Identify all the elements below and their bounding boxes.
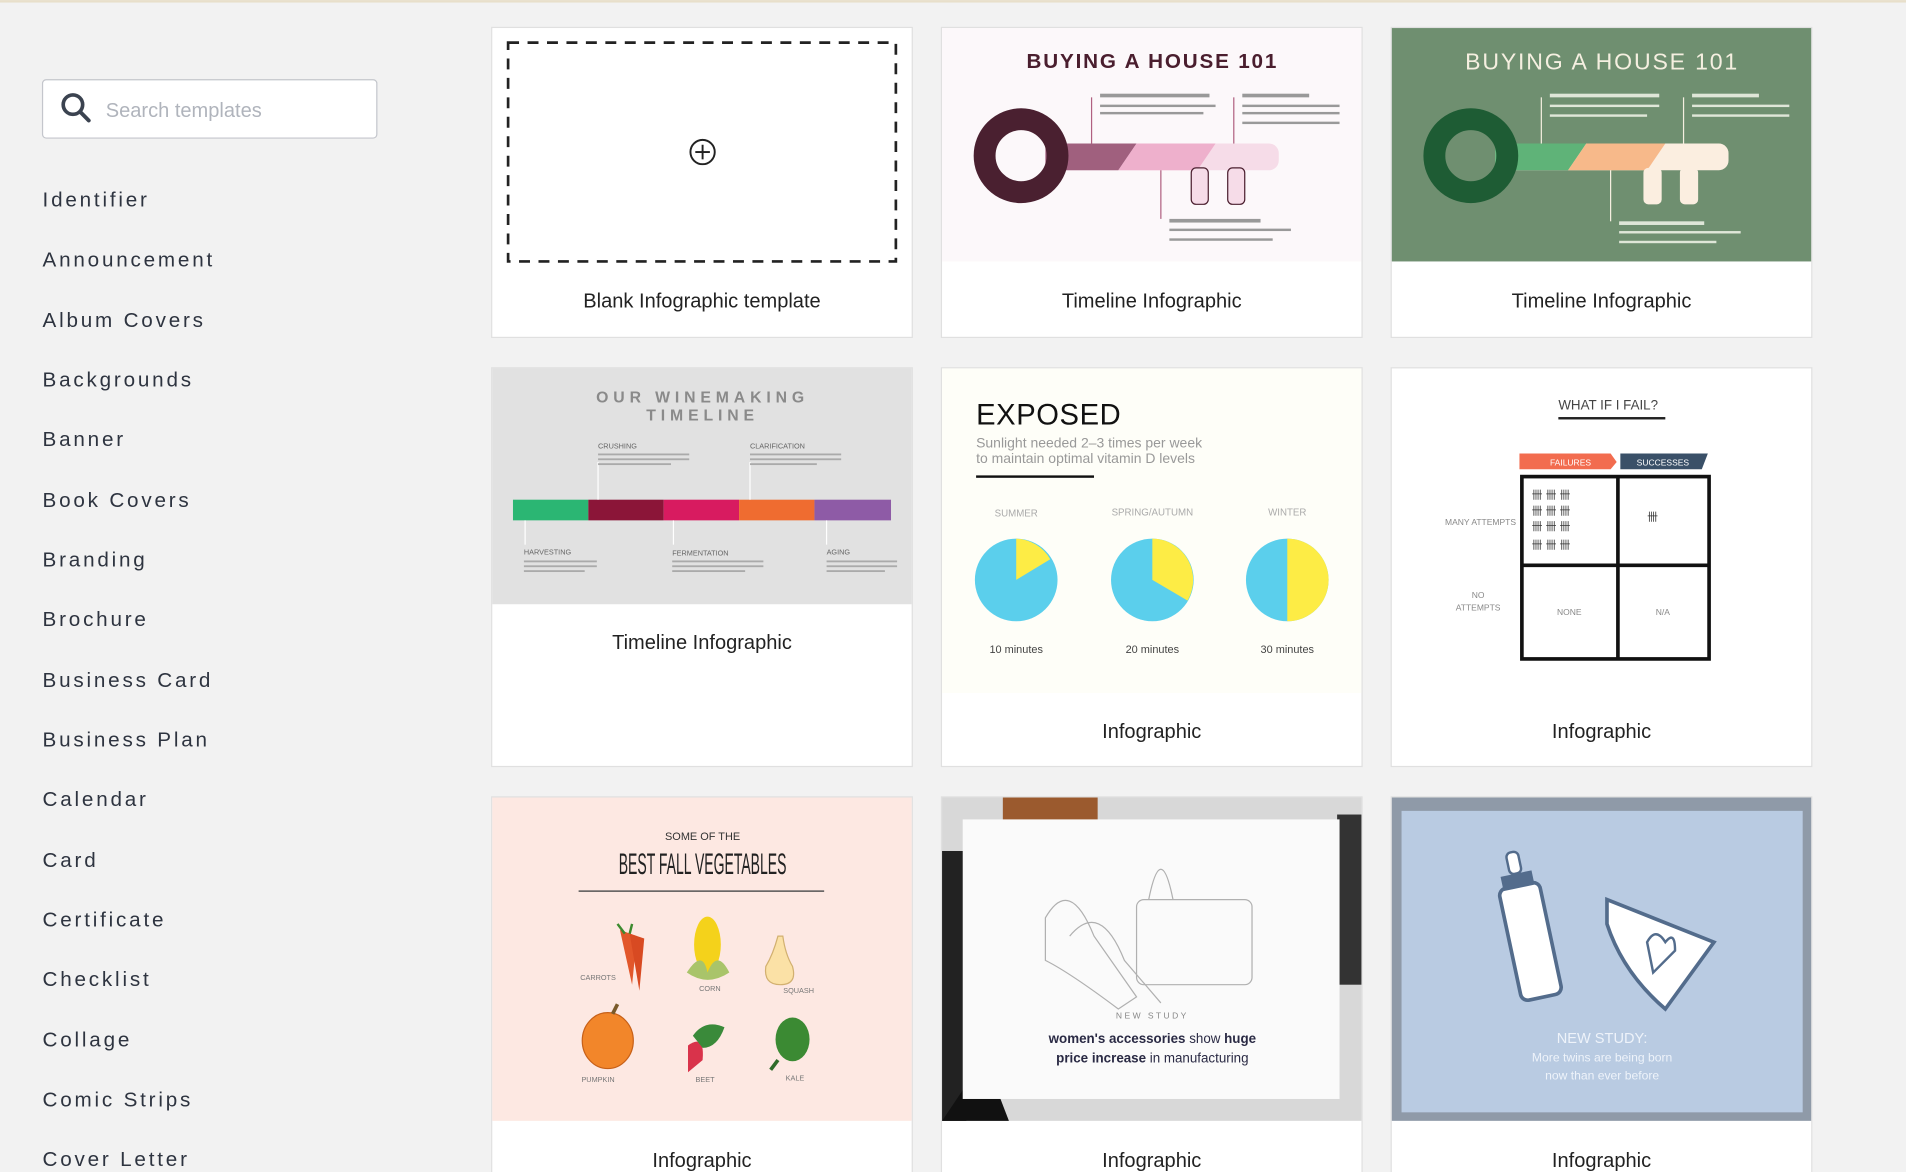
pie: summer bbox=[975, 539, 1058, 621]
card: exposed pie charts: WINTER bbox=[1268, 507, 1306, 518]
card: winemaking timeline: Timeline Infographic bbox=[612, 632, 792, 654]
sidebar category list: Certificate bbox=[43, 908, 166, 931]
card: exposed pie charts: EXPOSED bbox=[976, 399, 1121, 431]
card: what if I fail tally: 卌 卌 卌 bbox=[1532, 520, 1571, 533]
card: best fall vegetables: SOME OF THE bbox=[665, 831, 740, 843]
card: best fall vegetables: Infographic bbox=[652, 1150, 752, 1172]
card: timeline buying a house (pink) bbox=[941, 27, 1362, 337]
card: what if I fail tally: MANY ATTEMPTS bbox=[1445, 517, 1516, 527]
sidebar category list: Album Covers bbox=[43, 309, 206, 332]
card: exposed pie charts: to maintain optimal vitamin D levels bbox=[976, 450, 1195, 466]
card: exposed pie charts bbox=[941, 368, 1362, 767]
sidebar category list: Comic Strips bbox=[43, 1088, 193, 1111]
card: best fall vegetables: SQUASH bbox=[783, 986, 814, 995]
card: winemaking timeline: FERMENTATION bbox=[672, 549, 729, 558]
sidebar category list: Checklist bbox=[43, 968, 152, 991]
card: what if I fail tally: ATTEMPTS bbox=[1456, 602, 1501, 612]
icon: shoes and handbag sketch bbox=[1045, 869, 1252, 1009]
card: timeline buying a house (green): BUYING A HOUSE 101 bbox=[1465, 48, 1739, 74]
card: best fall vegetables: PUMPKIN bbox=[581, 1075, 615, 1084]
card: best fall vegetables: CORN bbox=[699, 984, 721, 993]
card: timeline buying a house (green) bbox=[1391, 27, 1812, 337]
card: timeline buying a house (pink): Timeline Infographic bbox=[1062, 291, 1242, 313]
card: women's accessories study: women's accessories show huge bbox=[1048, 1031, 1256, 1046]
card: winemaking timeline bbox=[492, 368, 912, 767]
card: women's accessories study: NEW STUDY bbox=[1116, 1011, 1189, 1021]
icon: beet bbox=[688, 1024, 724, 1072]
sidebar category list: Business Plan bbox=[43, 728, 210, 751]
card: what if I fail tally: SUCCESSES bbox=[1637, 458, 1689, 468]
card: what if I fail tally: FAILURES bbox=[1550, 458, 1591, 468]
sidebar category list: Banner bbox=[43, 428, 126, 451]
icon: carrots bbox=[618, 924, 644, 991]
icon: baby bottle bbox=[1491, 848, 1563, 1002]
sidebar category list: Card bbox=[43, 849, 99, 872]
card: women's accessories study: Infographic bbox=[1102, 1150, 1201, 1172]
card: what if I fail tally bbox=[1391, 368, 1812, 767]
card: best fall vegetables: BEST FALL VEGETABLES bbox=[619, 849, 786, 881]
card: timeline buying a house (pink): BUYING A HOUSE 101 bbox=[1027, 50, 1278, 73]
card: women's accessories study: price increase in manufacturing bbox=[1056, 1050, 1249, 1065]
icon: squash bbox=[765, 936, 794, 985]
icon: plus circle bbox=[690, 140, 715, 164]
sidebar category list: Book Covers bbox=[43, 489, 192, 512]
sidebar category list: Business Card bbox=[43, 669, 213, 692]
search placeholder: Search templates bbox=[106, 100, 262, 122]
card: what if I fail tally: N/A bbox=[1656, 607, 1670, 617]
card: what if I fail tally: WHAT IF I FAIL? bbox=[1558, 398, 1658, 413]
sidebar category list: Collage bbox=[43, 1029, 132, 1052]
card: what if I fail tally: NONE bbox=[1557, 607, 1582, 617]
sidebar category list bbox=[43, 189, 215, 1171]
icon: diaper with heart bbox=[1607, 900, 1714, 1009]
icon: kale bbox=[771, 1018, 810, 1070]
card: exposed pie charts: SUMMER bbox=[995, 509, 1038, 520]
card: new study twins: More twins are being born bbox=[1532, 1050, 1672, 1064]
card: exposed pie charts: 30 minutes bbox=[1261, 644, 1315, 656]
card: exposed pie charts: Infographic bbox=[1102, 721, 1201, 743]
card: winemaking timeline: TIMELINE bbox=[646, 408, 759, 425]
pie: winter bbox=[1246, 539, 1329, 621]
sidebar category list: Branding bbox=[43, 549, 148, 572]
card: what if I fail tally: 卌 卌 卌 bbox=[1532, 538, 1571, 551]
card: winemaking timeline: AGING bbox=[827, 547, 850, 556]
card: timeline buying a house (green): Timeline Infographic bbox=[1512, 291, 1691, 313]
card: best fall vegetables: BEET bbox=[696, 1075, 715, 1084]
card: what if I fail tally: 卌 bbox=[1647, 510, 1658, 523]
icon: pumpkin bbox=[582, 1004, 633, 1069]
card: best fall vegetables bbox=[492, 797, 912, 1172]
card: blank template: Blank Infographic template bbox=[583, 291, 821, 313]
card: best fall vegetables: CARROTS bbox=[580, 973, 616, 982]
card: what if I fail tally: NO bbox=[1472, 590, 1485, 600]
card: exposed pie charts: 10 minutes bbox=[989, 644, 1043, 656]
pie: spring/autumn bbox=[1111, 539, 1194, 621]
card: exposed pie charts: SPRING/AUTUMN bbox=[1112, 507, 1193, 518]
card: winemaking timeline: HARVESTING bbox=[524, 547, 571, 556]
card: winemaking timeline: OUR WINEMAKING bbox=[596, 389, 809, 406]
sidebar category list: Announcement bbox=[43, 248, 215, 271]
card: new study twins: Infographic bbox=[1552, 1150, 1651, 1172]
card: exposed pie charts: 20 minutes bbox=[1126, 644, 1180, 656]
card: what if I fail tally: 卌 卌 卌 bbox=[1532, 488, 1571, 501]
sidebar category list: Backgrounds bbox=[43, 369, 194, 392]
card: winemaking timeline: CRUSHING bbox=[598, 442, 637, 451]
card: new study twins: now than ever before bbox=[1545, 1069, 1659, 1083]
sidebar category list: Cover Letter bbox=[43, 1148, 190, 1171]
sidebar category list: Identifier bbox=[43, 189, 150, 212]
icon: magnifier bbox=[63, 95, 89, 120]
sidebar category list: Brochure bbox=[43, 608, 149, 631]
card: what if I fail tally: Infographic bbox=[1552, 721, 1651, 743]
search box bbox=[43, 80, 377, 138]
card: new study twins: NEW STUDY: bbox=[1557, 1031, 1647, 1047]
sidebar category list: Calendar bbox=[43, 788, 149, 811]
icon: corn bbox=[687, 917, 729, 980]
card: what if I fail tally: 卌 卌 卌 bbox=[1532, 504, 1571, 517]
card: new study twins bbox=[1391, 797, 1812, 1172]
card: exposed pie charts: Sunlight needed 2–3 times per week bbox=[976, 434, 1202, 450]
card: best fall vegetables: KALE bbox=[786, 1074, 804, 1083]
card: winemaking timeline: CLARIFICATION bbox=[750, 442, 805, 451]
card: women's accessories study bbox=[941, 797, 1362, 1172]
card: blank template bbox=[492, 27, 912, 337]
